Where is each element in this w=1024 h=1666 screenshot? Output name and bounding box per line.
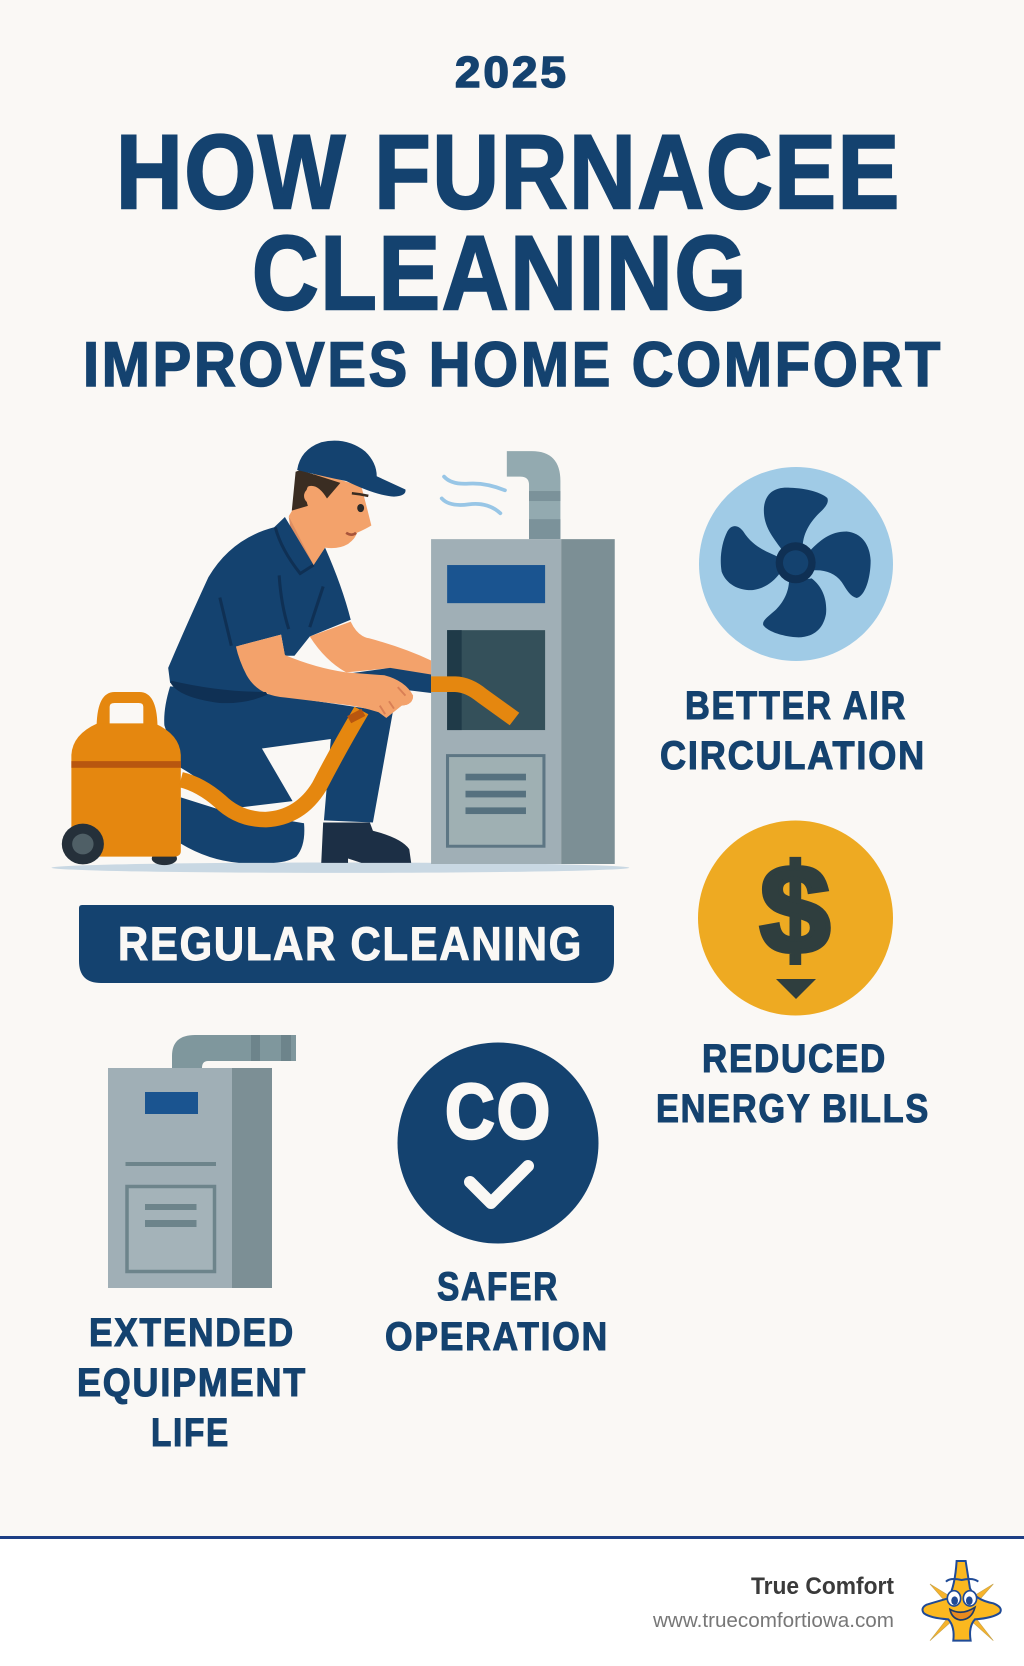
label: safer operation: SAFER	[437, 1265, 559, 1309]
label: better air circulation: BETTER AIR	[685, 684, 907, 728]
icon: fan	[699, 467, 893, 661]
label: extended equipment life: LIFE	[151, 1411, 230, 1455]
ground shadow	[51, 863, 629, 873]
logo: star mascot	[922, 1561, 1001, 1641]
label: extended equipment life	[77, 1311, 307, 1455]
heading line 3: IMPROVES HOME COMFORT	[83, 330, 943, 400]
label: reduced energy bills	[656, 1037, 930, 1131]
footer	[0, 1536, 1024, 1666]
technician	[164, 441, 431, 863]
label: better air circulation: CIRCULATION	[660, 734, 926, 778]
technician hand	[365, 675, 413, 718]
vacuum hose	[181, 684, 514, 820]
year: 2025	[455, 48, 569, 97]
heat waves	[442, 477, 505, 513]
icon: dollar savings	[698, 820, 893, 1016]
label: safer operation: OPERATION	[385, 1315, 609, 1359]
label: extended equipment life: EXTENDED	[89, 1311, 295, 1355]
icon: carbon monoxide check	[398, 1042, 598, 1244]
label: reduced energy bills: ENERGY BILLS	[656, 1087, 930, 1131]
illustration: technician cleaning furnace	[51, 441, 629, 873]
label: safer operation	[385, 1265, 609, 1359]
heading line 2: CLEANING	[252, 215, 748, 332]
furnace	[431, 451, 615, 864]
brand name: True Comfort	[751, 1573, 894, 1600]
label: extended equipment life: EQUIPMENT	[77, 1361, 307, 1405]
icon: carbon monoxide check: CO	[445, 1067, 552, 1155]
icon: furnace unit	[108, 1035, 296, 1288]
heading line 1: HOW FURNACEE	[116, 114, 901, 231]
banner: regular cleaning: REGULAR CLEANING	[118, 917, 583, 970]
title block	[83, 48, 943, 400]
website: www.truecomfortiowa.com	[652, 1610, 894, 1632]
label: reduced energy bills: REDUCED	[702, 1037, 887, 1081]
vacuum cleaner	[62, 692, 181, 865]
label: better air circulation	[660, 684, 926, 778]
banner: regular cleaning	[79, 905, 614, 983]
icon: dollar savings: $	[760, 839, 830, 980]
